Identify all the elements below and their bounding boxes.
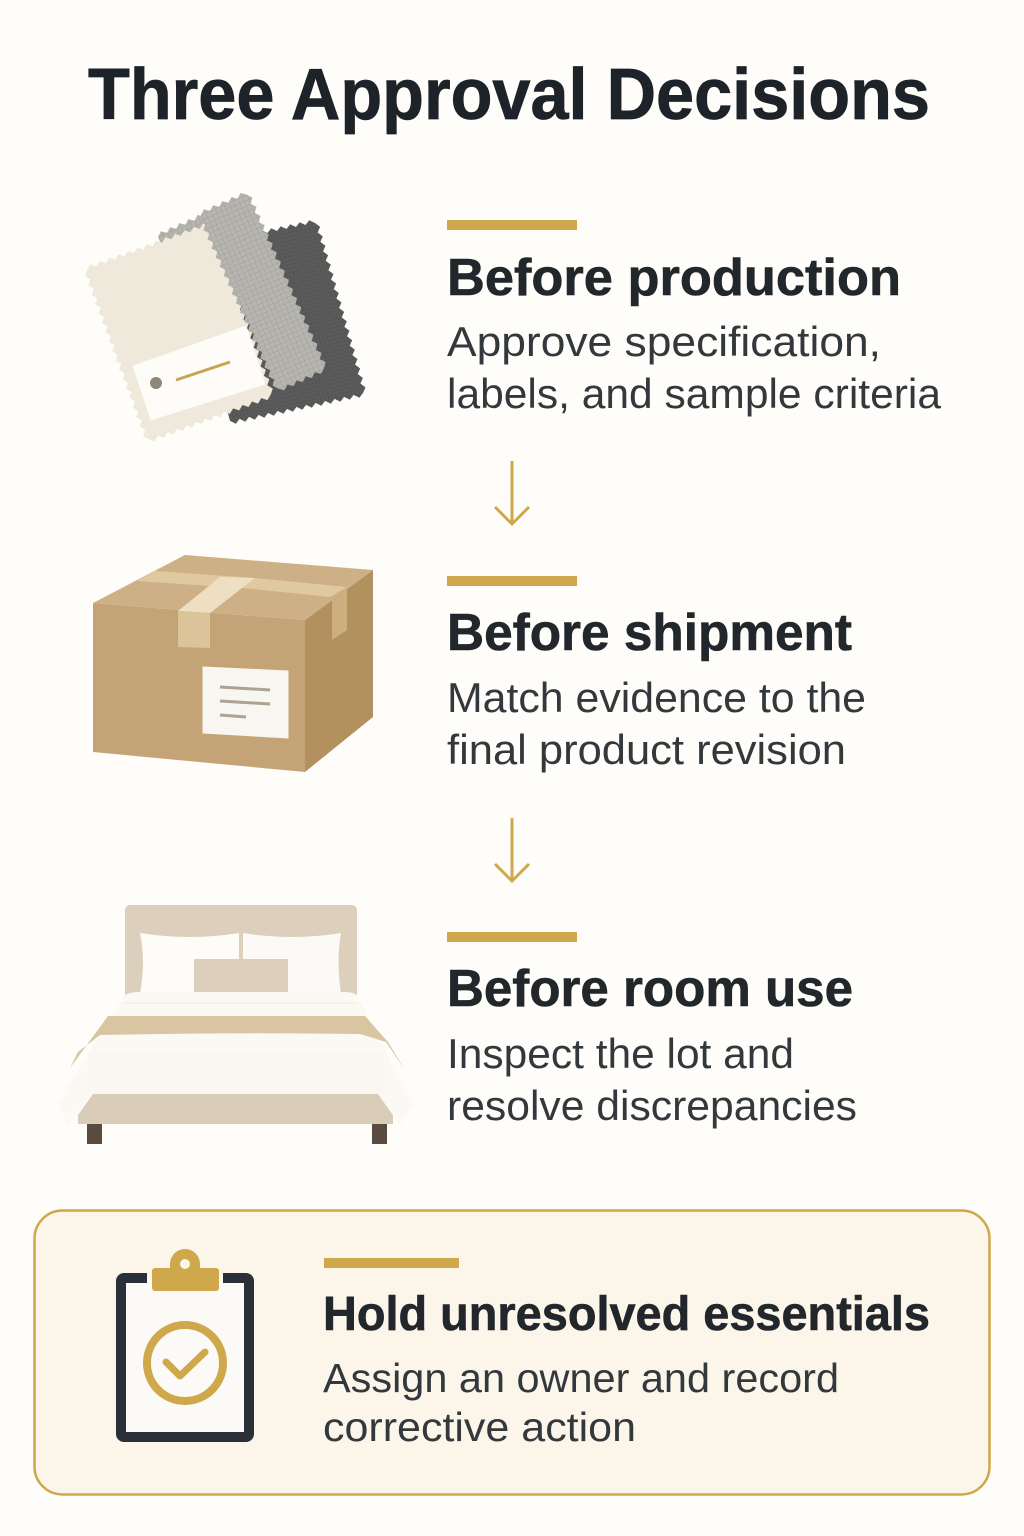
icon: fabric swatches bbox=[82, 189, 368, 444]
arrow: shipment to room use bbox=[495, 818, 529, 881]
panel: hold unresolved essentials bbox=[34, 1210, 990, 1494]
decision 2: before shipment bbox=[447, 576, 866, 773]
panel text: Hold unresolved essentials bbox=[323, 1288, 930, 1341]
icon: clipboard with check bbox=[121, 1249, 249, 1437]
decision 3: before room use: resolve discrepancies bbox=[447, 1082, 857, 1129]
arrow: production to shipment bbox=[495, 461, 529, 524]
decision 2: before shipment: final product revision bbox=[447, 726, 846, 773]
icon: cardboard box bbox=[93, 555, 373, 772]
decision 1: before production: Approve specification, bbox=[447, 318, 881, 365]
panel text bbox=[323, 1258, 930, 1450]
decision 3: before room use: Before room use bbox=[447, 960, 853, 1018]
decision 1: before production bbox=[447, 220, 942, 417]
title: Three Approval Decisions bbox=[88, 55, 930, 135]
panel text: corrective action bbox=[323, 1404, 636, 1450]
decision 3: before room use bbox=[447, 932, 857, 1129]
decision 1: before production: labels, and sample criteria bbox=[447, 370, 942, 417]
panel text: Assign an owner and record bbox=[323, 1355, 839, 1401]
icon: bed bbox=[58, 905, 413, 1144]
decision 2: before shipment: Before shipment bbox=[447, 604, 852, 662]
decision 3: before room use: Inspect the lot and bbox=[447, 1030, 794, 1077]
decision 2: before shipment: Match evidence to the bbox=[447, 674, 866, 721]
decision 1: before production: Before production bbox=[447, 249, 901, 307]
